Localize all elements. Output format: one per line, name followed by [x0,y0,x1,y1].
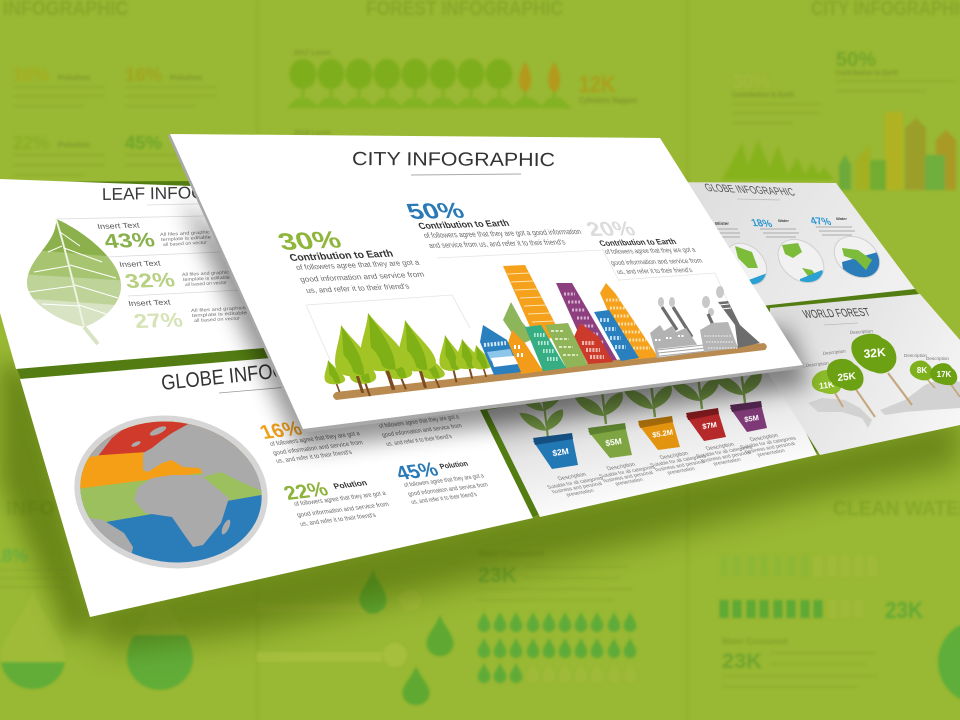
stat: winter: Winter [715,221,729,226]
stat: 27%: All files and graphics [191,305,247,313]
stat: 30% [274,227,426,295]
stat: 16% orange: of followers agree that they are got a [269,430,361,448]
factory 1 [650,297,708,358]
stat: 16% orange: 16% [256,417,306,444]
stat: 47%: 47% [808,215,834,228]
blue tower [594,310,639,361]
heading: city infographic: CITY INFOGRAPHIC [352,149,555,171]
pot descriptions: business and personal [654,459,707,473]
pot descriptions: business and personal [602,470,655,484]
icon: leaf [27,219,121,346]
stat: 20%: of followers agree that they are got a [603,246,697,256]
pot 4: $7M [667,355,726,441]
stat: 20%: 20% [583,218,640,241]
pot descriptions: Suitable for all categories [695,445,754,460]
heading: small globe infographic: GLOBE INFOGRAPHIC [703,182,797,199]
tree: 17K: 17K [937,370,952,379]
stat: 43%: All files and graphic [160,229,211,237]
pot descriptions: Description [606,462,637,472]
faded background slide content: Contribution to Earth [836,70,898,77]
stat: 20%: Contribution to Earth [597,237,678,248]
faded background slide content: Polution [58,75,90,82]
stat: 16% orange [256,417,365,465]
pot 5: $5M: $5M [744,413,760,424]
pot descriptions: Suitable for all categories [598,465,657,480]
pot descriptions: Suitable for all categories [739,436,798,451]
stat text: upper right [378,414,463,448]
pot 1: $2M [516,389,578,469]
stat: 27%: 27% [132,310,185,333]
stat: 27%: all based on vector [194,316,241,323]
stat: 18%: 18% [749,217,775,230]
tree: 11K: 11K [818,379,836,391]
stat: 50%: and service from us, and refer it to their friend's [427,238,567,250]
shadow of the centre slide [180,200,810,450]
stat: 16% orange: good information and service from [272,439,365,457]
panel: globe infographic large [20,340,533,617]
cooling tower [716,286,760,348]
tree: 25K [823,349,875,417]
tree: 17K: Description [926,356,949,361]
tree: 25K: 25K [837,371,857,384]
faded background slide content: Cylinders Happen [579,96,637,105]
faded background slide content: Water Consumed [722,637,788,646]
slide edge [168,134,806,433]
stat: 30%: Contribution to Earth [288,249,395,264]
slide face [170,134,803,429]
tree: 8K: Description [904,353,927,358]
panel: city infographic [168,134,806,433]
stat: 22%: Polution [332,478,369,491]
icon: globe 1 [729,242,768,285]
panel: world forest [768,294,960,455]
chart: city illustration [318,265,767,400]
stat: 27% [127,298,248,333]
stat: 32%: all based on vector [185,280,228,287]
red building [574,323,613,364]
pot 5: $5M [710,349,767,432]
stat: 50% [402,198,583,250]
ground strip [333,343,767,400]
pot descriptions [546,433,798,498]
faded background slide content: 22% [13,133,49,153]
stat: 43%: Insert Text [96,221,142,231]
pot descriptions: Description [705,442,736,452]
stat: 45%: us, and refer it to their friend's [410,491,478,506]
panel: plant pots [487,349,817,517]
faded background slide content: 50% [836,49,876,71]
map: world [808,378,960,428]
stat: 22%: good information and service from [296,501,391,519]
stat: 47%: Water [836,216,847,221]
teal block [525,325,566,371]
pot 3: $5.2M: $5.2M [652,427,674,440]
icon: globe 2 [778,239,824,283]
stat: 32%: 32% [123,270,177,293]
stat: 50%: 50% [402,198,468,224]
faded background slide content: 23K [478,564,517,587]
stat text: upper right: us, and refer it to their friend's [385,433,453,448]
tree: 8K: 8K [917,366,927,375]
pot descriptions: Description [749,433,780,443]
faded background slide content: Polution [170,75,202,82]
faded background slide content: Water Consumed [478,549,544,558]
orange right tower [600,283,658,360]
stat: 32%: Insert Text [118,259,163,269]
stat: 16% orange: us, and refer it to their friend's [275,449,354,465]
pot descriptions: presentation [565,488,596,498]
stat: 45% [392,458,489,506]
heading: globe infographic: GLOBE INFOGRAPHIC [160,352,356,395]
stat: 32% [118,259,231,293]
faded background slide content: 23K [722,650,762,673]
stat: 45%: 45% [392,458,442,485]
cast shadows on background [0,360,960,650]
icon: globe map [74,416,268,568]
blue house [480,325,521,375]
faded background slide content: 30% [732,71,770,93]
stat: 20%: us, and refer it to their friend's [615,266,694,276]
stat: 22%: us, and refer it to their friend's [299,512,378,528]
light green block [545,323,588,368]
pot descriptions: business and personal [551,481,604,495]
stat: winter [715,221,740,237]
panel: globe infographic small [688,182,915,306]
pot descriptions: presentation [666,466,697,476]
forest trees [318,311,496,397]
stat: 50%: Contribution to Earth [417,218,511,231]
pot 2: $5M [571,370,632,458]
faded background slide content: 12K [579,71,615,97]
pot descriptions: Suitable for all categories [546,476,605,491]
stat: 32%: All files and graphic [182,270,230,277]
stat: 20%: good information and service from [609,257,704,267]
dark gaps beneath the slides [0,180,960,614]
pot descriptions: business and personal [744,441,797,455]
faded background slide content: 2018 Loren [294,130,331,137]
stat: 22% [280,478,391,528]
tree: 25K: Description [823,349,846,356]
orange tower [503,265,560,345]
stat: 27%: template is editable [192,310,248,318]
faded background slide content: 16% [125,65,162,85]
faded background slide content: 23K [885,597,923,623]
pot descriptions: presentation [756,448,787,458]
purple tower [556,283,617,362]
stat: 47% [808,215,855,235]
stat: 30%: good information and service from [298,270,426,284]
pot 2: $5M: $5M [605,436,622,448]
pot descriptions: presentation [614,477,645,487]
stat: 30%: of followers agree that they are got a [294,258,421,272]
small orange block [508,330,543,374]
light green tower [503,302,535,345]
stat: 45%: good information and service from [407,482,489,498]
stat: 43%: all based on vector [163,240,208,247]
faded background slide content: 2017 Loren [294,50,331,57]
stat: 43% [96,221,212,253]
tree: 32K: Description [850,328,873,335]
pot 1: $2M: $2M [552,446,569,458]
tree: 17K [926,356,960,397]
stat: 18% [749,217,799,237]
stat: 22%: 22% [280,478,332,505]
heading: world forest: WORLD FOREST [800,305,873,321]
stat: 30%: 30% [274,227,345,256]
tree: 32K [850,328,912,405]
faded background slide content: Polution [58,142,90,149]
stat: 20% [583,218,704,276]
tree: 11K: Description [806,361,829,368]
stat: 18%: Water [778,218,789,223]
stat text: upper right: of followers agree that they are got a [378,414,461,430]
stat: 43%: template is editable [161,234,212,242]
pot descriptions: Description [659,451,690,461]
stat: 30%: us, and refer it to their friend's [304,282,411,295]
icon: globe 3 [834,236,880,278]
stat: 45%: of followers agree that they are got a [403,473,486,489]
stat: 43%: 43% [102,230,157,253]
panel: leaf infographic [0,179,266,369]
pot descriptions: business and personal [700,450,753,464]
stat: 22%: of followers agree that they are got a [293,490,387,508]
stat: 32%: template is editable [183,275,231,282]
factory 2 [700,296,738,352]
faded background slide content: INFO [6,498,55,520]
stat: 50%: of followers agree that they are got a good information [422,227,583,240]
faded background slide content: Contribution to Earth [732,92,794,99]
heading: leaf infographic: LEAF INFOGRAPHIC [102,182,270,204]
pot 4: $7M: $7M [702,420,718,431]
tree: 32K: 32K [863,345,887,361]
pot 3: $5.2M [620,363,680,450]
tree: 11K [806,361,843,407]
pot descriptions: presentation [712,457,743,467]
tree: 8K [904,353,935,388]
pot descriptions: Suitable for all categories [649,454,708,469]
pot descriptions: Description [557,472,588,482]
stat: 27%: Insert Text [127,298,173,308]
faded background slide content: 16% [13,65,49,85]
stat: 45%: Polution [438,459,470,471]
stat text: upper right: good information and service from [381,423,463,439]
faded background slide content: 45% [125,133,162,153]
